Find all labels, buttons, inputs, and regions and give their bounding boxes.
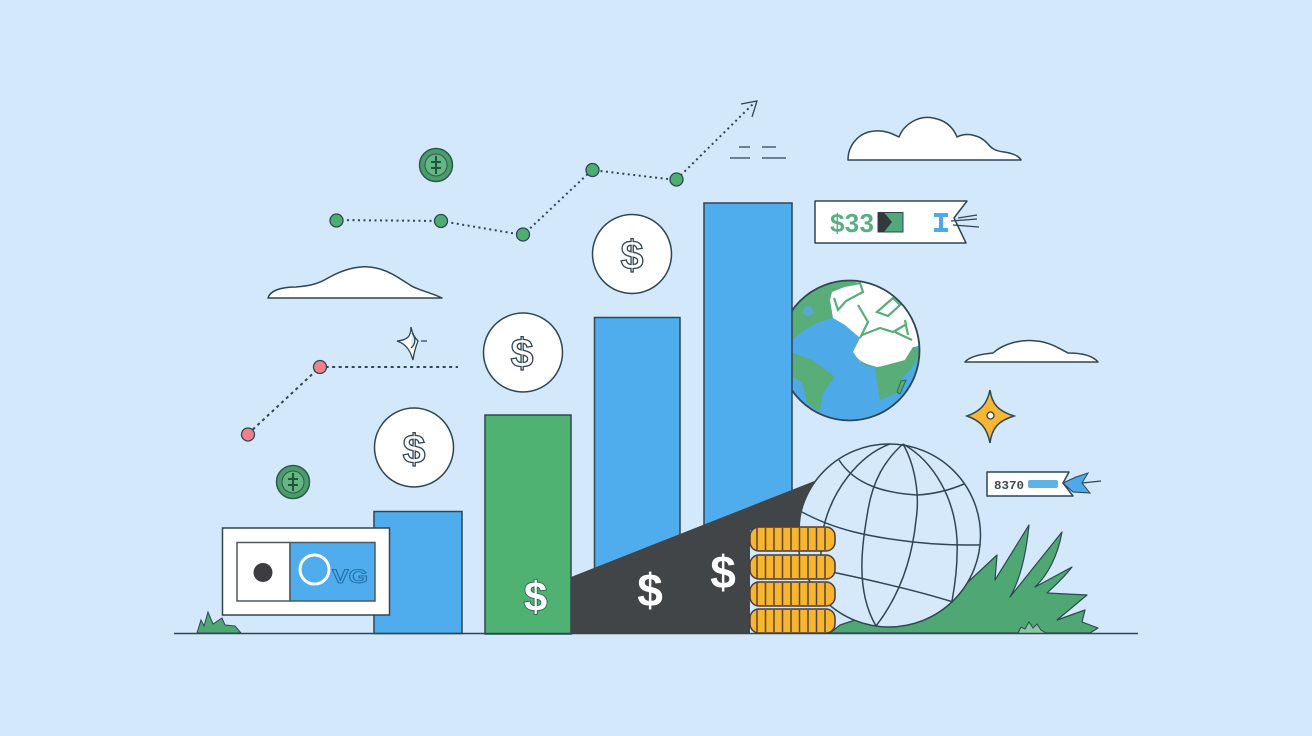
cloud: middle left	[268, 267, 442, 298]
illustration: global financial growth	[174, 100, 1138, 635]
bar: blue short	[374, 512, 462, 634]
icon: outline sparkle	[397, 327, 427, 360]
dark wedge with dollar signs: $	[710, 546, 736, 598]
dollar coin: low: $	[403, 426, 426, 472]
dotted trend line: lower with red points	[242, 360, 458, 441]
icon: green coin bottom	[276, 466, 310, 498]
grass: large right	[830, 525, 1098, 633]
dollar coin: mid	[484, 313, 562, 392]
price card: left banknote	[222, 528, 390, 615]
ground line	[174, 632, 1138, 634]
icon: green coin top	[420, 148, 452, 182]
coin stack	[750, 527, 835, 633]
bar: green with dollar: $	[524, 573, 547, 620]
bar: green with dollar	[485, 415, 571, 634]
cloud: right	[965, 341, 1098, 362]
grass: left tuft	[197, 612, 241, 633]
price tag: lower right: 8370	[994, 479, 1024, 493]
price tag: top right	[815, 201, 979, 243]
price tag: lower right	[987, 472, 1101, 496]
icon: wireframe globe	[798, 444, 980, 627]
dollar coin: low	[374, 408, 454, 487]
north west green land	[792, 281, 858, 340]
green coast outlines	[833, 283, 912, 340]
cloud: top right	[848, 117, 1021, 160]
icon: globe with continents	[792, 280, 920, 422]
price card: left banknote: VG	[332, 567, 368, 588]
dollar coin: mid: $	[511, 330, 534, 376]
dollar coin: high	[592, 214, 672, 294]
icon: yellow star	[967, 390, 1014, 443]
dark wedge with dollar signs	[571, 480, 817, 633]
white northern land	[830, 280, 925, 367]
bar: blue medium	[594, 318, 680, 578]
grass: small centre tuft	[1018, 622, 1046, 633]
dotted trend line: upper with arrow	[330, 101, 786, 241]
bar: blue tall	[704, 203, 792, 543]
dollar coin: high: $	[621, 232, 644, 278]
South America	[792, 353, 835, 412]
dark wedge with dollar signs: $	[637, 564, 663, 616]
Africa	[853, 347, 922, 400]
price tag: top right: $33	[830, 208, 874, 238]
